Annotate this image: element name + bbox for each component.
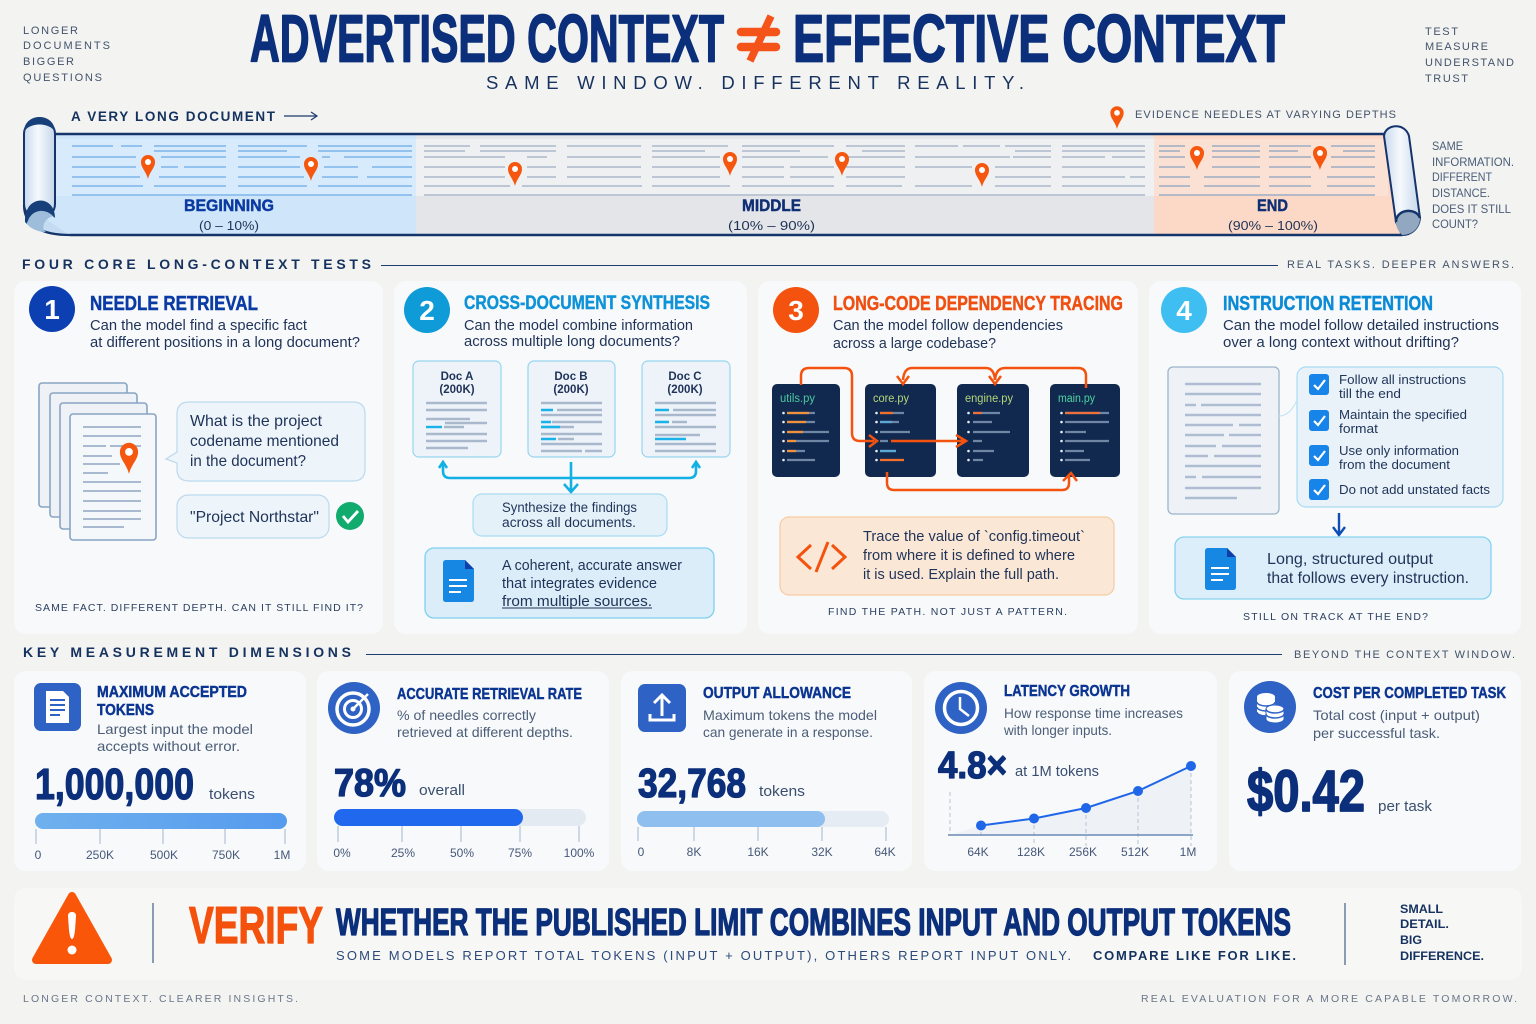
- metric: cost per completed task: [1229, 671, 1521, 871]
- callout aside: DETAIL.: [1400, 917, 1449, 931]
- description: [397, 707, 573, 740]
- check 4: [1309, 479, 1329, 500]
- answer bubble: "Project Northstar": [190, 509, 319, 526]
- section labels: BEGINNING: [184, 196, 274, 215]
- doc B: (200K): [553, 384, 589, 396]
- side note: SAME: [1432, 141, 1463, 153]
- arrows converging: [439, 462, 700, 492]
- badge 2: [404, 287, 450, 333]
- heading: four core tests: REAL TASKS. DEEPER ANSWERS.: [1287, 259, 1514, 271]
- heading: TOKENS: [97, 702, 154, 719]
- line chart: [948, 761, 1196, 859]
- value: [938, 745, 1099, 787]
- value: [334, 762, 465, 805]
- footer note: FIND THE PATH. NOT JUST A PATTERN.: [828, 606, 1067, 618]
- heading: INSTRUCTION RETENTION: [1223, 293, 1433, 315]
- instruction checklist: [1279, 367, 1503, 507]
- callout aside: SMALL: [1400, 902, 1443, 916]
- description: [833, 318, 1063, 352]
- doc A: [413, 361, 501, 457]
- long document: [1168, 367, 1279, 514]
- title: EFFECTIVE CONTEXT: [793, 2, 1285, 76]
- file: main.py: [1050, 384, 1120, 477]
- side note: DIFFERENT: [1432, 172, 1492, 184]
- description: [97, 721, 253, 754]
- document label with arrow: A VERY LONG DOCUMENT: [71, 109, 276, 124]
- panel: long-code dependency tracing: [758, 281, 1138, 634]
- heading: key measurement dimensions: [23, 644, 1515, 661]
- value: at 1M tokens: [1015, 764, 1099, 780]
- heading: OUTPUT ALLOWANCE: [703, 685, 851, 702]
- line chart: 128K: [1017, 845, 1045, 859]
- description: Largest input the model: [97, 721, 253, 737]
- description: across multiple long documents?: [464, 334, 680, 350]
- value: 78%: [334, 762, 406, 805]
- badge 4: 4: [1176, 295, 1192, 326]
- description: How response time increases: [1004, 705, 1183, 721]
- bar scale: 32K: [811, 845, 833, 859]
- synthesis box: across all documents.: [502, 515, 636, 530]
- bar scale: 16K: [747, 845, 769, 859]
- long document scroll: [24, 117, 1420, 235]
- icon: document: [34, 683, 81, 731]
- beginning text lines: [72, 146, 412, 195]
- instruction checklist: Maintain the specified: [1339, 407, 1467, 422]
- top-right tagline: UNDERSTAND: [1425, 57, 1514, 69]
- footer note: SAME FACT. DIFFERENT DEPTH. CAN IT STILL FIND IT?: [35, 602, 363, 614]
- line chart: 256K: [1069, 845, 1097, 859]
- icon: coins: [1244, 681, 1296, 733]
- heading: key measurement dimensions: BEYOND THE CONTEXT WINDOW.: [1294, 649, 1515, 661]
- side note: [1432, 141, 1514, 231]
- heading: LATENCY GROWTH: [1004, 683, 1130, 700]
- badge 3: 3: [788, 295, 804, 326]
- line chart: 64K: [967, 845, 989, 859]
- icon: check: [336, 502, 364, 530]
- answer bubble: [177, 495, 329, 538]
- value: $0.42: [1247, 759, 1365, 824]
- callout aside: DIFFERENCE.: [1400, 949, 1484, 963]
- line chart: 512K: [1121, 845, 1149, 859]
- description: Can the model follow detailed instructions: [1223, 318, 1499, 334]
- callout note: COMPARE LIKE FOR LIKE.: [1093, 948, 1296, 963]
- value: 4.8×: [938, 745, 1007, 787]
- icon: document: [443, 560, 474, 602]
- icon: code: [798, 542, 845, 572]
- top-right tagline: MEASURE: [1425, 41, 1488, 53]
- long document scroll: (0 – 10%): [199, 218, 259, 233]
- doc C: [642, 361, 730, 457]
- dependency arrows: [801, 368, 1086, 490]
- badge 4: [1161, 287, 1207, 333]
- description: with longer inputs.: [1003, 722, 1112, 738]
- top-left tagline: QUESTIONS: [23, 72, 102, 84]
- file: utils.py: utils.py: [780, 393, 815, 405]
- icon: warning: [36, 896, 108, 960]
- value: per task: [1378, 799, 1433, 815]
- value: tokens: [759, 784, 805, 800]
- icon: clock: [935, 682, 987, 734]
- bar scale: 25%: [391, 846, 415, 860]
- bar scale: 250K: [86, 848, 114, 862]
- footer note: STILL ON TRACK AT THE END?: [1243, 611, 1428, 623]
- doc B: Doc B: [554, 371, 588, 383]
- document stack: [39, 383, 156, 540]
- heading: four core tests: FOUR CORE LONG-CONTEXT TESTS: [22, 256, 371, 272]
- doc B: [528, 361, 615, 457]
- doc A: (200K): [439, 384, 475, 396]
- side note: DISTANCE.: [1432, 188, 1490, 200]
- description: retrieved at different depths.: [397, 724, 573, 740]
- description: per successful task.: [1313, 725, 1440, 741]
- top-left tagline: LONGER: [23, 25, 78, 37]
- metric: accurate retrieval rate: [317, 671, 609, 871]
- value: 32,768: [638, 760, 746, 806]
- output box: Long, structured output: [1267, 551, 1434, 568]
- top-right tagline: [1425, 26, 1514, 85]
- bar scale: 0: [638, 845, 645, 859]
- bar scale: [333, 809, 595, 860]
- heading: ACCURATE RETRIEVAL RATE: [397, 686, 582, 703]
- answer box: A coherent, accurate answer: [502, 558, 682, 574]
- bar scale: 64K: [874, 845, 896, 859]
- bar scale: 100%: [564, 846, 595, 860]
- bar scale: 8K: [687, 845, 701, 859]
- description: [464, 318, 693, 350]
- file: utils.py: [772, 384, 840, 477]
- right roll: [1384, 126, 1420, 235]
- needle legend: EVIDENCE NEEDLES AT VARYING DEPTHS: [1135, 109, 1396, 121]
- value: tokens: [209, 787, 255, 803]
- heading: CROSS-DOCUMENT SYNTHESIS: [464, 293, 710, 314]
- file: main.py: main.py: [1058, 393, 1095, 405]
- description: [1003, 705, 1183, 738]
- icon: upload: [638, 684, 686, 732]
- pins: [141, 155, 155, 179]
- instruction checklist: till the end: [1339, 386, 1401, 401]
- check 1: [1309, 374, 1329, 395]
- question bubble: [166, 402, 365, 481]
- icon: target: [328, 682, 380, 734]
- top-left tagline: BIGGER: [23, 56, 74, 68]
- left roll: [24, 120, 55, 218]
- subtitle: SAME WINDOW. DIFFERENT REALITY.: [486, 72, 1024, 93]
- description: Maximum tokens the model: [703, 707, 877, 723]
- prompt box: [780, 517, 1114, 595]
- bar scale: [35, 813, 290, 862]
- needle legend: [1110, 106, 1396, 129]
- badge 1: [29, 286, 75, 332]
- scroll outline: [55, 134, 1402, 235]
- file: core.py: core.py: [873, 393, 909, 405]
- metric: maximum accepted tokens: [14, 671, 306, 871]
- description: [1223, 318, 1499, 351]
- prompt box: from where it is defined to where: [863, 548, 1075, 564]
- side note: DOES IT STILL: [1432, 204, 1512, 216]
- file: engine.py: [957, 384, 1029, 477]
- description: over a long context without drifting?: [1223, 335, 1459, 351]
- callout aside: BIG: [1400, 933, 1422, 947]
- check 3: [1309, 445, 1329, 466]
- doc A: Doc A: [441, 371, 473, 383]
- title: ADVERTISED CONTEXT: [250, 2, 724, 76]
- panel: instruction retention: [1149, 281, 1521, 634]
- bar scale: 0: [35, 848, 42, 862]
- badge 2: 2: [419, 295, 435, 326]
- side note: INFORMATION.: [1432, 157, 1514, 169]
- heading: key measurement dimensions: KEY MEASUREMENT DIMENSIONS: [23, 644, 351, 660]
- description: across a large codebase?: [833, 336, 996, 352]
- middle text lines: [424, 146, 1145, 195]
- doc C: Doc C: [668, 371, 702, 383]
- description: accepts without error.: [97, 738, 240, 754]
- bar scale: 75%: [508, 846, 532, 860]
- footer right: REAL EVALUATION FOR A MORE CAPABLE TOMORROW.: [1141, 993, 1517, 1005]
- value: 1,000,000: [35, 760, 194, 809]
- answer box: that integrates evidence: [502, 576, 657, 592]
- metric: latency growth: [924, 671, 1217, 871]
- badge 1: 1: [44, 294, 60, 325]
- answer box: from multiple sources.: [502, 594, 652, 610]
- metric: output allowance: [621, 671, 912, 871]
- long document scroll: (10% – 90%): [728, 218, 815, 233]
- callout note: SOME MODELS REPORT TOTAL TOKENS (INPUT + OUTPUT), OTHERS REPORT INPUT ONLY.: [336, 948, 1071, 963]
- arrow down: [1333, 513, 1345, 535]
- description: [703, 707, 877, 740]
- question bubble: in the document?: [190, 453, 306, 470]
- description: at different positions in a long document?: [90, 335, 360, 351]
- instruction checklist: Follow all instructions: [1339, 372, 1467, 387]
- panel: cross-document synthesis: [394, 281, 747, 634]
- bar scale: 500K: [150, 848, 178, 862]
- file: engine.py: engine.py: [965, 393, 1013, 405]
- synthesis box: Synthesize the findings: [502, 500, 637, 515]
- instruction checklist: from the document: [1339, 457, 1450, 472]
- bar scale: 0%: [333, 846, 351, 860]
- icon: document: [1205, 548, 1236, 590]
- badge 3: [773, 287, 819, 333]
- heading: NEEDLE RETRIEVAL: [90, 293, 258, 315]
- instruction checklist: format: [1339, 421, 1378, 436]
- heading: [97, 684, 247, 719]
- prompt box: it is used. Explain the full path.: [863, 567, 1059, 583]
- instruction checklist: Use only information: [1339, 443, 1459, 458]
- description: can generate in a response.: [703, 724, 873, 740]
- bar scale: 750K: [212, 848, 240, 862]
- file: core.py: [865, 384, 936, 477]
- callout aside: [1400, 902, 1484, 963]
- panel: needle retrieval: [14, 281, 383, 634]
- description: [1313, 707, 1480, 741]
- prompt box: Trace the value of `config.timeout`: [863, 529, 1085, 545]
- top-left tagline: [23, 25, 110, 84]
- answer box: [425, 548, 714, 618]
- output box: that follows every instruction.: [1267, 570, 1469, 587]
- top-right tagline: TRUST: [1425, 73, 1468, 85]
- line chart: 1M: [1180, 845, 1196, 859]
- description: % of needles correctly: [397, 707, 536, 723]
- top-left tagline: DOCUMENTS: [23, 40, 110, 52]
- description: [90, 318, 360, 351]
- callout: verify: [14, 888, 1522, 980]
- question bubble: codename mentioned: [190, 433, 339, 450]
- bar scale: 1M: [274, 848, 290, 862]
- description: Total cost (input + output): [1313, 707, 1480, 723]
- long document scroll: MIDDLE: [742, 196, 801, 215]
- verify word: VERIFY: [189, 897, 323, 955]
- output box: [1175, 537, 1491, 599]
- value: overall: [419, 783, 465, 799]
- long document scroll: END: [1257, 196, 1288, 215]
- side note: COUNT?: [1432, 219, 1478, 231]
- description: Can the model combine information: [464, 318, 693, 334]
- heading: four core tests: [22, 256, 1514, 272]
- instruction checklist: Do not add unstated facts: [1339, 482, 1491, 497]
- top-right tagline: TEST: [1425, 26, 1458, 38]
- description: Can the model find a specific fact: [90, 318, 307, 334]
- long document scroll: (90% – 100%): [1228, 218, 1318, 233]
- doc C: (200K): [667, 384, 703, 396]
- bar scale: 50%: [450, 846, 474, 860]
- synthesis box: [473, 494, 667, 536]
- description: Can the model follow dependencies: [833, 318, 1063, 334]
- heading: MAXIMUM ACCEPTED: [97, 684, 247, 701]
- check 2: [1309, 410, 1329, 431]
- heading: LONG-CODE DEPENDENCY TRACING: [833, 293, 1123, 315]
- end text lines: [1159, 146, 1375, 195]
- footer left: LONGER CONTEXT. CLEARER INSIGHTS.: [23, 993, 298, 1005]
- bar scale: [637, 811, 896, 859]
- question bubble: What is the project: [190, 413, 323, 430]
